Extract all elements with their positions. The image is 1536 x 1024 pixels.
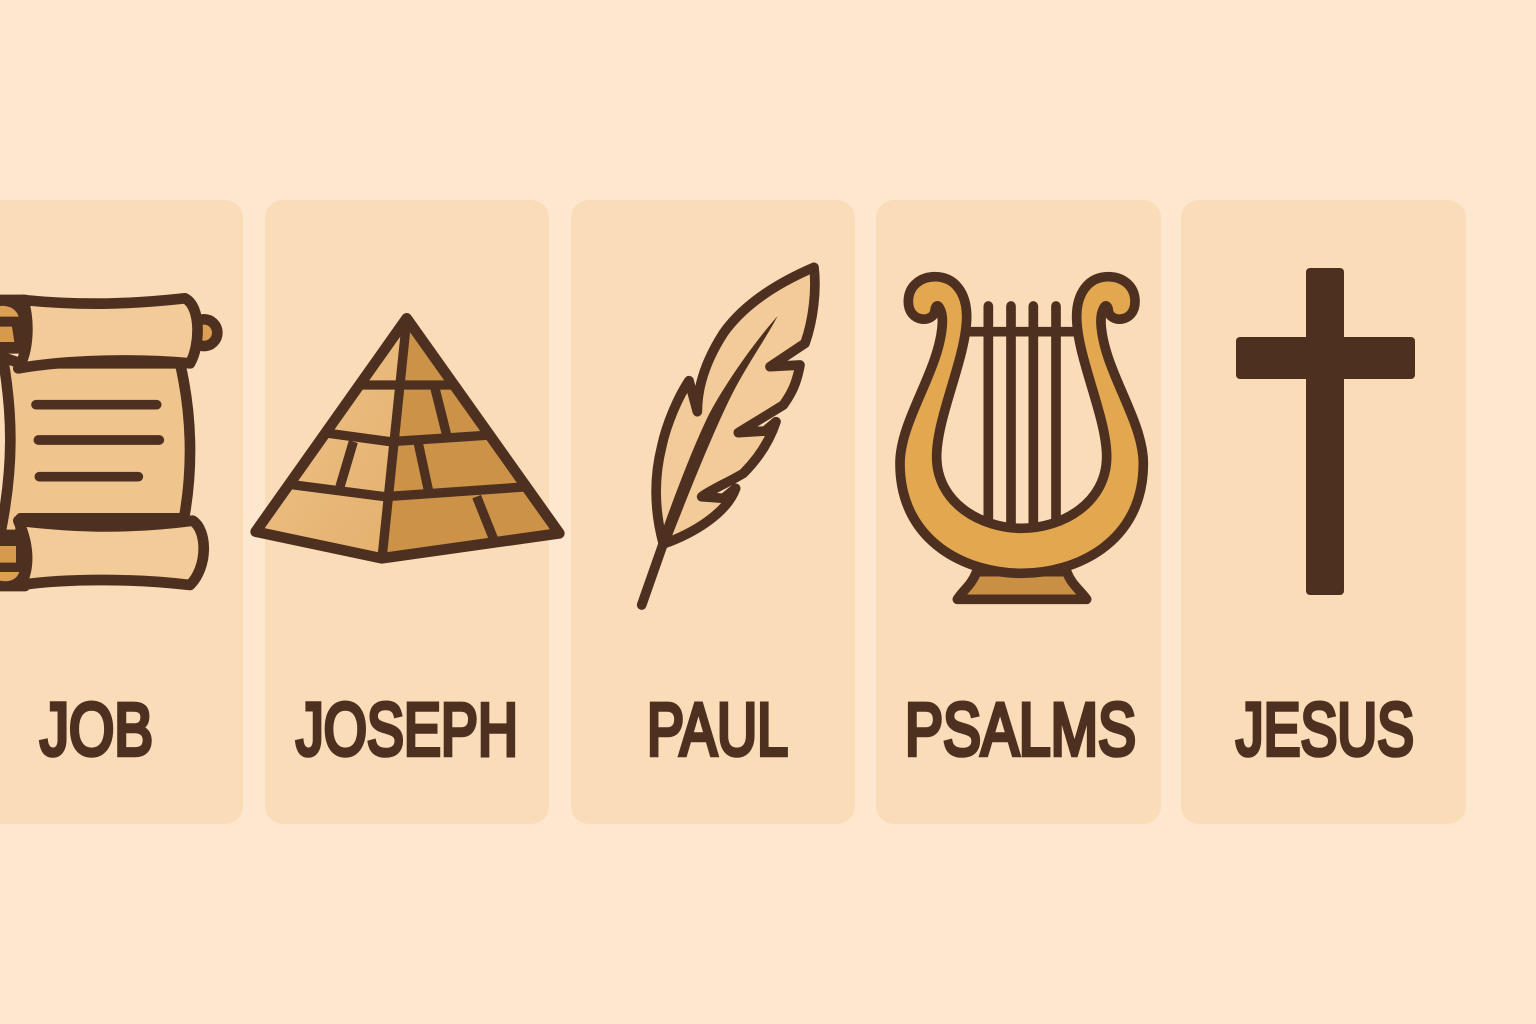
- panel: paul: [571, 200, 855, 824]
- panel: jesus: [1181, 200, 1466, 824]
- panel: psalms: [876, 200, 1161, 824]
- panel: joseph: [252, 200, 563, 824]
- label: psalms: PSALMS: [905, 688, 1136, 771]
- icon: pyramid: [252, 315, 563, 562]
- icon: feather: [642, 267, 815, 605]
- label: job: JOB: [40, 688, 153, 771]
- label: jesus: JESUS: [1236, 688, 1414, 771]
- icon: cross: [1236, 268, 1415, 595]
- label: paul: PAUL: [647, 688, 788, 771]
- panel: job: [0, 200, 243, 824]
- label: joseph: JOSEPH: [296, 688, 518, 771]
- icon: lyre: [900, 277, 1143, 599]
- icon: scroll: [0, 298, 217, 586]
